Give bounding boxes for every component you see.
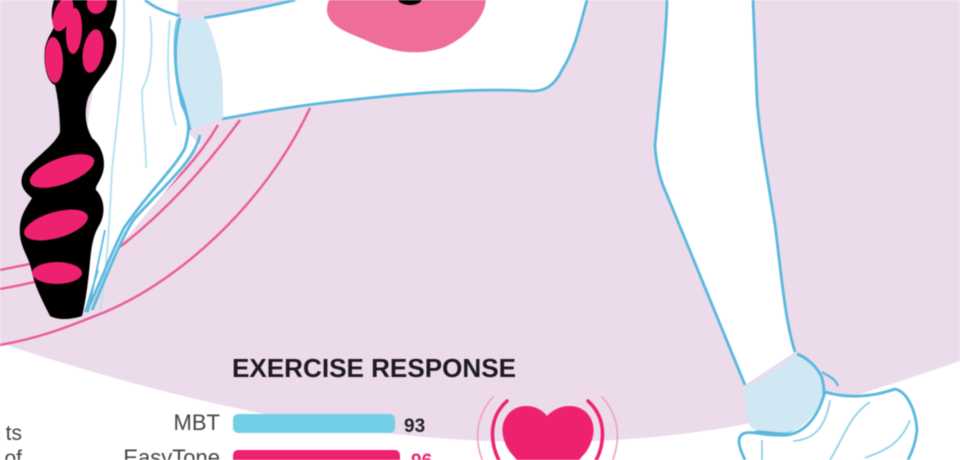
bar: MBT: MBT: [174, 410, 220, 435]
front shoe: [739, 372, 917, 460]
pink motion arcs: [0, 108, 310, 345]
rear shoe: [75, 0, 200, 314]
bar: MBT: [174, 410, 425, 437]
striped pink patch: [327, 0, 486, 52]
cut-off side text: [4, 422, 22, 460]
rear leg: [145, 0, 587, 131]
ankle cuff: [174, 18, 223, 131]
shoe sole: [20, 0, 117, 319]
bar: MBT: 93: [404, 416, 425, 437]
icon: beating heart: [478, 397, 617, 460]
sole pads: [21, 0, 110, 284]
heading: EXERCISE RESPONSE: [232, 353, 516, 383]
bar: EasyTone: [123, 445, 432, 460]
bar chart: [123, 410, 432, 460]
front leg: [655, 0, 824, 434]
front ankle cuff: [745, 354, 824, 434]
cut-off side text: ts: [6, 422, 22, 445]
